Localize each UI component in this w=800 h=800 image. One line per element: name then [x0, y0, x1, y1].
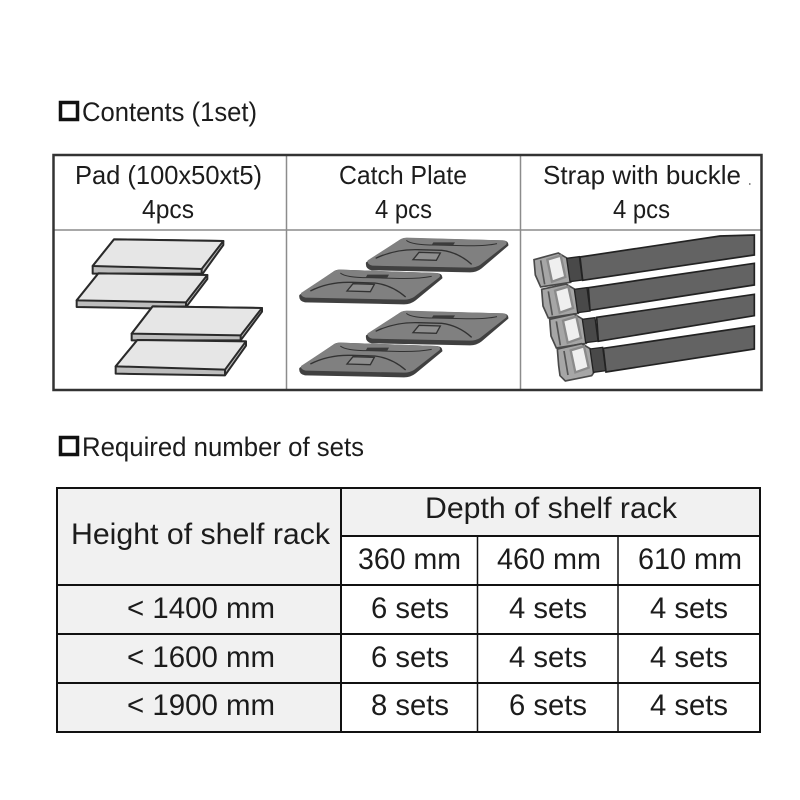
table column and row headings: 360 mm — [358, 543, 461, 576]
row: under 1900 mm — [127, 689, 728, 722]
label: catch plate: Catch Plate — [339, 160, 467, 190]
row: under 1400 mm: 4 sets — [650, 592, 728, 625]
label: pad: 4pcs — [142, 194, 194, 224]
table column and row headings: 610 mm — [638, 543, 742, 576]
label: catch plate: 4 pcs — [375, 194, 432, 224]
row: under 1900 mm: < 1900 mm — [127, 689, 275, 722]
illustration: four catch plates — [299, 238, 508, 377]
label: catch plate — [339, 160, 467, 224]
label: strap with buckle — [543, 160, 750, 224]
illustration: four pads — [77, 239, 262, 375]
row: under 1400 mm: 6 sets — [371, 592, 449, 625]
label: strap with buckle: 4 pcs — [613, 194, 670, 224]
label: pad — [75, 160, 262, 224]
heading: required number of sets: Required number of sets — [82, 432, 364, 462]
panel: required sets table — [57, 488, 760, 732]
row: under 1600 mm: 6 sets — [371, 641, 449, 674]
panel: contents table — [53, 155, 762, 390]
label: pad: Pad (100x50xt5) — [75, 160, 262, 190]
label: strap with buckle: Strap with buckle — [543, 160, 741, 190]
row: under 1400 mm: 4 sets — [509, 592, 587, 625]
row: under 1600 mm: < 1600 mm — [127, 641, 275, 674]
heading: contents: Contents (1set) — [82, 97, 257, 127]
row: under 1600 mm — [127, 641, 728, 674]
row: under 1900 mm: 4 sets — [650, 689, 728, 722]
table shaded header cells — [57, 488, 760, 732]
row: under 1600 mm: 4 sets — [509, 641, 587, 674]
table column and row headings: 460 mm — [497, 543, 601, 576]
illustration: four straps with buckles — [534, 235, 754, 381]
row: under 1900 mm: 6 sets — [509, 689, 587, 722]
row: under 1400 mm — [127, 592, 728, 625]
row: under 1900 mm: 8 sets — [371, 689, 449, 722]
table column and row headings: Height of shelf rack — [71, 518, 331, 551]
row: under 1600 mm: 4 sets — [650, 641, 728, 674]
table column and row headings: Depth of shelf rack — [425, 492, 678, 525]
row: under 1400 mm: < 1400 mm — [127, 592, 275, 625]
table column and row headings — [71, 492, 742, 576]
